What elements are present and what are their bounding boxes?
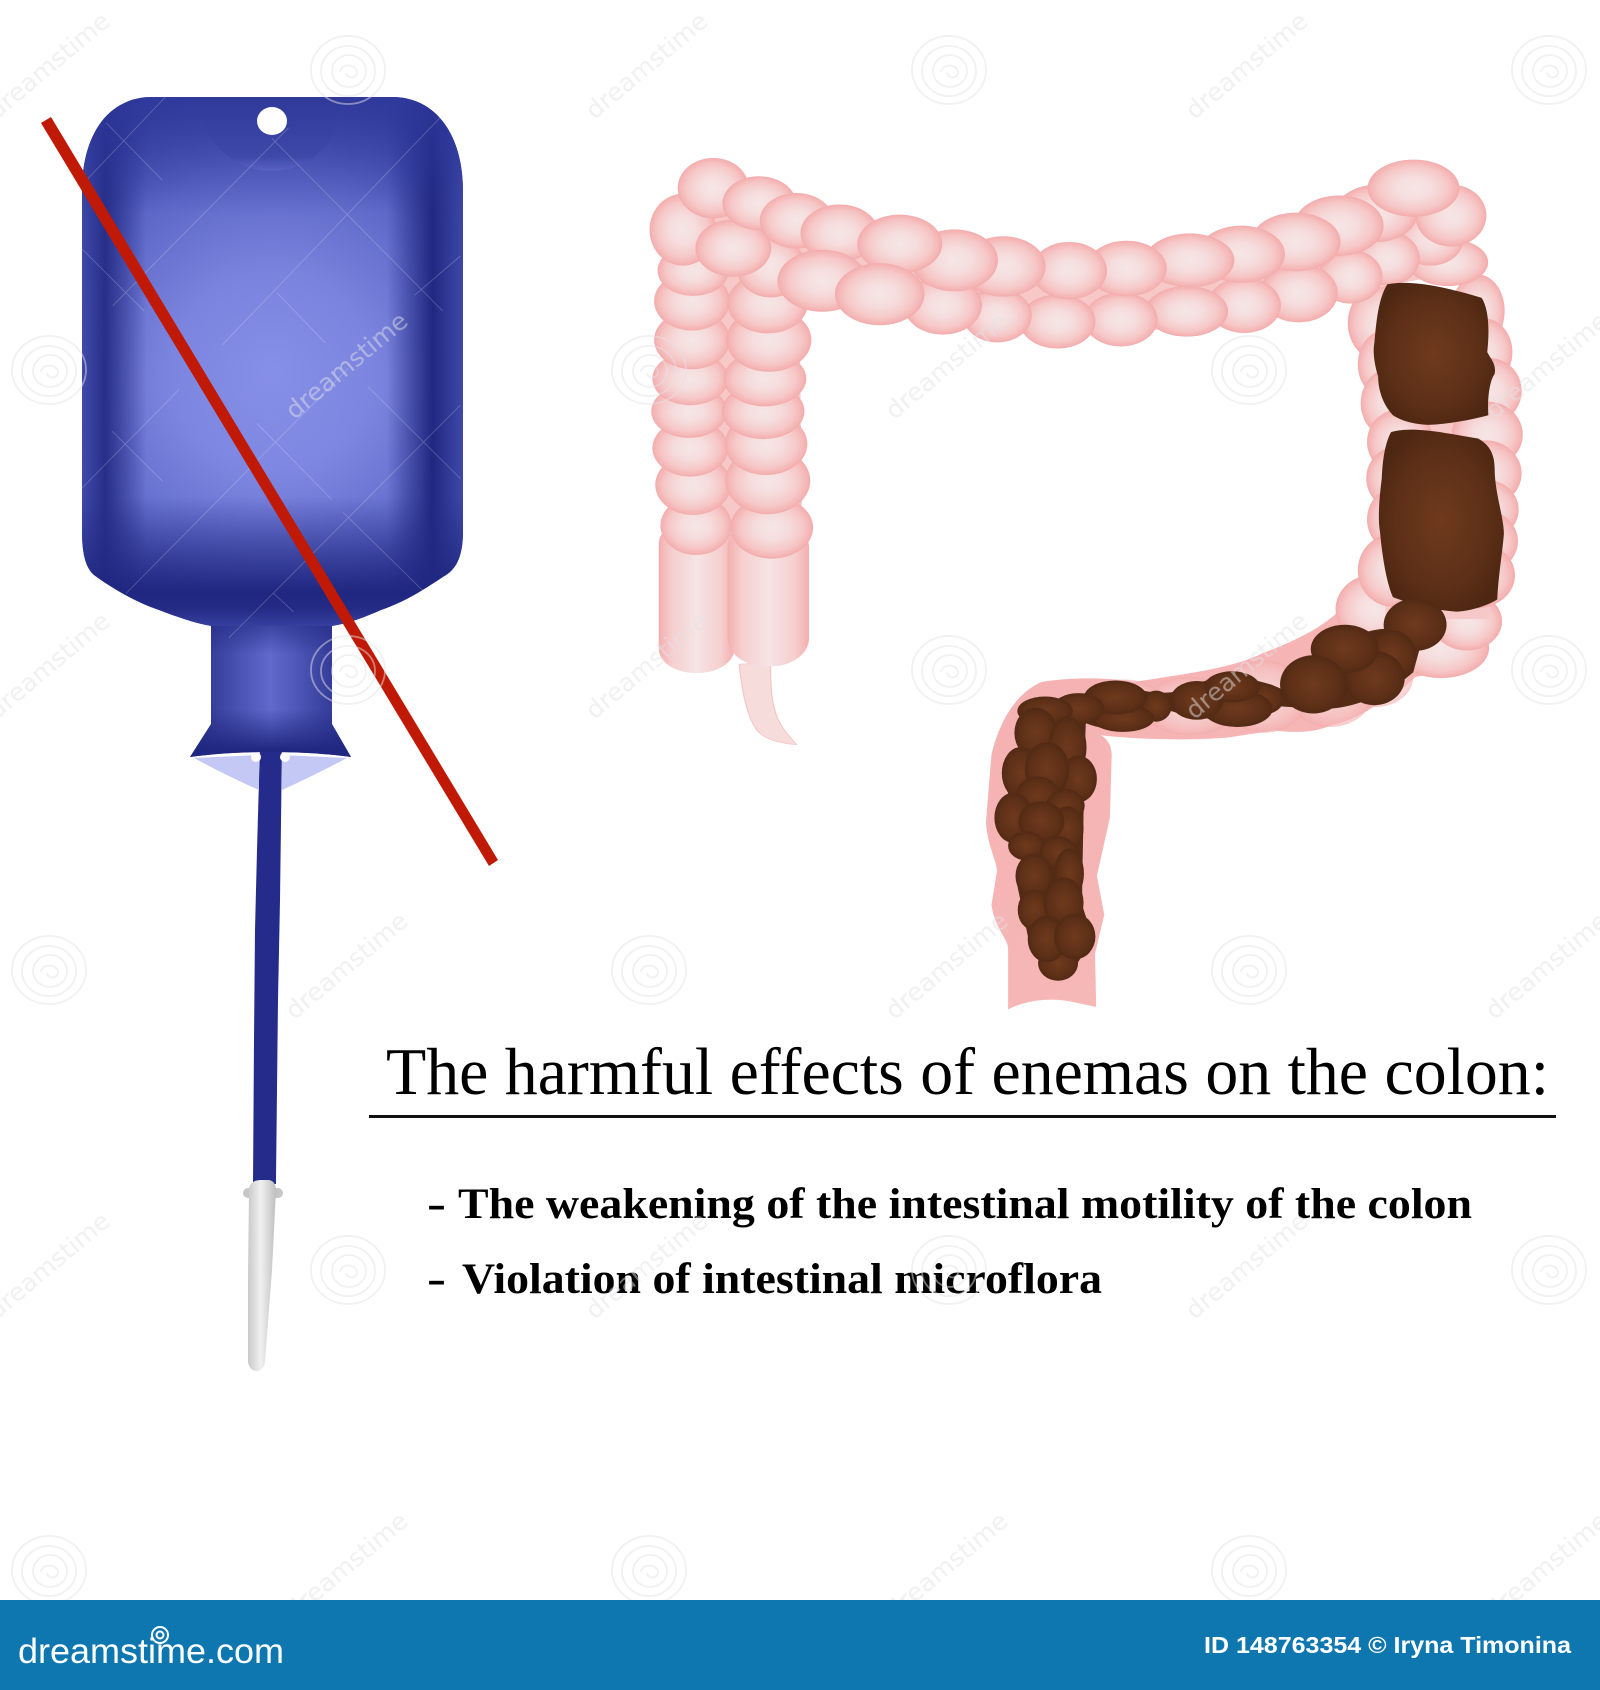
panel: colon illustration [650,158,1523,1009]
list item 2: - [427,1256,446,1303]
watermark text: dreamstime [580,1206,713,1325]
footer logo swirl [152,1627,168,1643]
colon base fill [664,185,1480,528]
title: The harmful effects of enemas on the colon: [386,1035,1549,1109]
list item 2: Violation of intestinal microflora [462,1256,1102,1303]
panel: enema bag illustration [81,97,463,1371]
transverse colon lower row [904,210,1488,348]
sigmoid colon folds [1078,647,1413,735]
watermark grid lines on bag [81,97,460,638]
large stool mass upper [1374,283,1495,425]
stool masses [994,283,1504,981]
watermark text: dreamstime [280,906,413,1025]
nozzle [243,1180,283,1371]
text block: effects list [427,1181,1472,1303]
watermark text: dreamstime [580,606,713,725]
prohibition slash [41,117,498,866]
transverse colon upper row [911,160,1486,299]
transverse and ascending colon [650,158,1488,745]
watermark text: dreamstime [280,1506,413,1625]
watermark text: dreamstime [1180,6,1313,125]
ascending colon sac left [659,519,734,673]
outlet highlights [251,752,290,762]
watermark text: dreamstime [1180,606,1313,725]
translucent bag outlet [194,755,347,790]
bag hanging notch [194,97,347,171]
appendix [739,662,796,745]
bag neck and flare [190,620,351,757]
watermark text: dreamstime [280,306,413,425]
bag hanging hole [257,107,287,135]
list item 1: The weakening of the intestinal motility of the colon [458,1181,1472,1228]
footer logo text: dreamstime.com [18,1632,284,1671]
watermark text: dreamstime [1180,1206,1313,1325]
large stool mass lower [1379,430,1504,612]
watermark text: dreamstime [880,1506,1013,1625]
tube [253,745,282,1184]
title underline [369,1115,1556,1118]
watermark text: dreamstime [880,906,1013,1025]
ascending colon sac right [728,519,809,666]
bag body [82,97,463,626]
stool backing in sigmoid colon [997,629,1422,973]
watermark text: dreamstime [580,6,713,125]
watermark text: dreamstime [880,306,1013,425]
ascending colon haustra [651,245,813,559]
list item 1: - [427,1181,446,1228]
sigmoid colon and rectum [986,595,1493,1009]
descending colon haustra [1336,275,1523,678]
stool pellets in rectal section [994,708,1097,981]
footer bar [0,1600,1600,1690]
footer credit: ID 148763354 © Iryna Timonina [1204,1632,1571,1658]
stool pellets in sigmoid colon [1017,599,1447,732]
hepatic flexure cluster [650,158,942,325]
